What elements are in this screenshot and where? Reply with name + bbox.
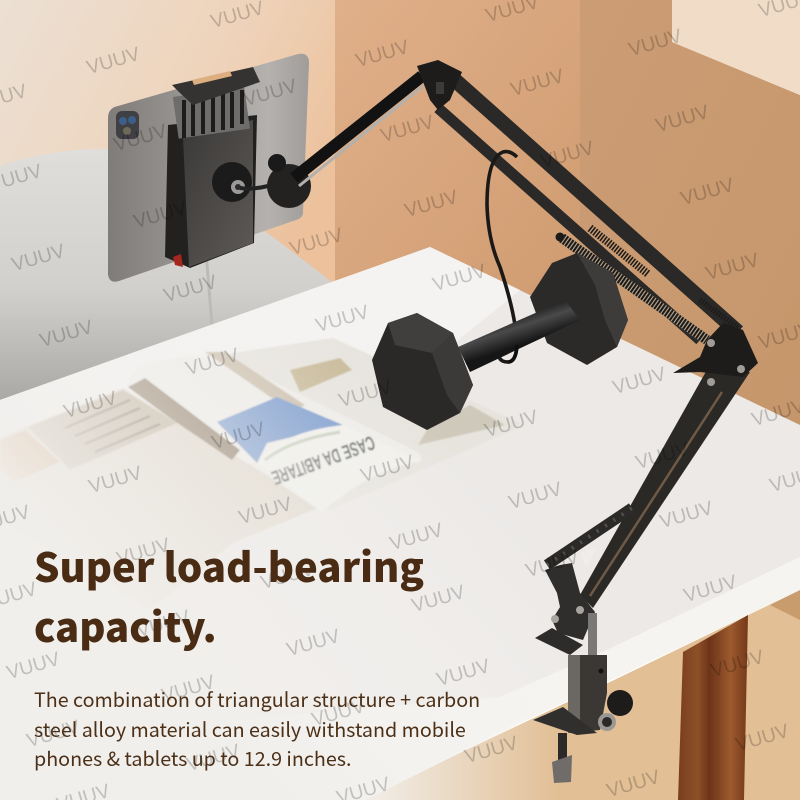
description: The combination of triangular structure + carbon bbox=[34, 684, 480, 713]
watermarks: VUUV bbox=[430, 260, 488, 296]
watermarks: VUUV bbox=[111, 120, 169, 156]
watermarks: VUUV bbox=[703, 249, 761, 285]
watermarks: VUUV bbox=[9, 240, 67, 276]
title bbox=[34, 536, 424, 654]
watermarks: VUUV bbox=[434, 655, 492, 691]
upper arm bbox=[417, 60, 738, 340]
watermarks: VUUV bbox=[159, 671, 217, 707]
watermarks: VUUV bbox=[284, 625, 342, 661]
dumbbell bbox=[372, 253, 628, 430]
description bbox=[34, 684, 480, 772]
watermarks: VUUV bbox=[482, 406, 540, 442]
watermarks: VUUV bbox=[37, 316, 95, 352]
watermarks: VUUV bbox=[538, 137, 596, 173]
white table bbox=[0, 247, 800, 800]
description: steel alloy material can easily withstand mobile bbox=[34, 714, 466, 742]
title: Super load-bearing bbox=[34, 536, 424, 594]
wall background bbox=[0, 0, 800, 440]
watermarks: VUUV bbox=[358, 451, 416, 487]
watermarks: VUUV bbox=[508, 65, 566, 101]
watermarks: VUUV bbox=[678, 174, 736, 210]
title: capacity. bbox=[34, 596, 217, 654]
watermarks: VUUV bbox=[409, 581, 467, 617]
watermarks: VUUV bbox=[258, 558, 316, 594]
watermarks: VUUV bbox=[506, 478, 564, 514]
watermarks: VUUV bbox=[523, 546, 581, 582]
watermarks: VUUV bbox=[4, 648, 62, 684]
watermarks: VUUV bbox=[313, 301, 371, 337]
cable bbox=[487, 152, 517, 362]
mount knob bbox=[212, 162, 252, 202]
desk clamp bbox=[533, 613, 633, 783]
watermarks: VUUV bbox=[681, 571, 739, 607]
watermarks: VUUV bbox=[241, 75, 299, 111]
watermarks: VUUV bbox=[84, 43, 142, 79]
watermarks: VUUV bbox=[184, 740, 242, 776]
watermarks: VUUV bbox=[353, 36, 411, 72]
lower left fade bbox=[0, 247, 560, 800]
description: phones & tablets up to 12.9 inches. bbox=[34, 743, 351, 772]
watermarks: VUUV bbox=[633, 438, 691, 474]
cable loop over bar bbox=[508, 345, 517, 362]
watermarks: VUUV bbox=[653, 101, 711, 137]
watermarks: VUUV bbox=[24, 716, 82, 752]
watermarks: VUUV bbox=[86, 462, 144, 498]
watermarks: VUUV bbox=[114, 534, 172, 570]
lower arm bbox=[580, 368, 750, 608]
watermarks: VUUV bbox=[61, 387, 119, 423]
lower spring bracket bbox=[545, 508, 632, 640]
watermarks: VUUV bbox=[131, 197, 189, 233]
watermarks: VUUV bbox=[287, 224, 345, 260]
magazine bbox=[0, 338, 525, 610]
watermarks: VUUV bbox=[626, 25, 684, 61]
watermarks: VUUV bbox=[183, 344, 241, 380]
watermarks: VUUV bbox=[387, 519, 445, 555]
watermarks: VUUV bbox=[657, 497, 715, 533]
tablet bbox=[108, 54, 309, 282]
watermarks: VUUV bbox=[610, 363, 668, 399]
magazine headline: CASE DA ABITARE bbox=[269, 431, 378, 488]
armchair bbox=[0, 149, 332, 405]
watermarks: VUUV bbox=[309, 695, 367, 731]
watermarks: VUUV bbox=[161, 271, 219, 307]
elbow joint bbox=[673, 323, 758, 386]
watermarks: VUUV bbox=[236, 493, 294, 529]
watermarks: VUUV bbox=[733, 720, 791, 756]
watermarks: VUUV bbox=[402, 186, 460, 222]
floor bbox=[360, 590, 800, 800]
watermarks: VUUV bbox=[708, 646, 766, 682]
phone holder bbox=[165, 67, 260, 268]
watermarks: VUUV bbox=[378, 111, 436, 147]
watermarks: VUUV bbox=[209, 418, 267, 454]
ball joint bbox=[240, 154, 311, 208]
table leg bbox=[678, 615, 748, 800]
watermarks: VUUV bbox=[462, 732, 520, 768]
forearm bbox=[294, 76, 423, 186]
watermarks: VUUV bbox=[336, 376, 394, 412]
watermarks: VUUV bbox=[134, 606, 192, 642]
